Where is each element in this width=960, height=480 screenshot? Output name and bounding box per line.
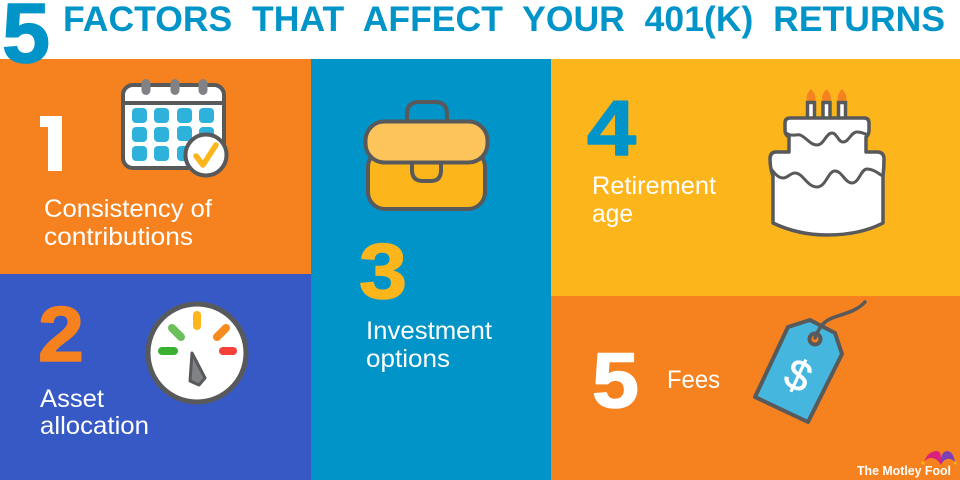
label: consistency of contributions: Consistency of: [44, 195, 212, 223]
panel: fees: [551, 296, 960, 480]
icon: gauge: [148, 304, 246, 402]
number 4: 4: [587, 84, 636, 172]
label: investment options: options: [366, 345, 450, 373]
panel: consistency of contributions: [0, 59, 311, 274]
icon: price tag: $: [777, 349, 819, 403]
icon: birthday cake: [770, 89, 884, 235]
number 2: 2: [38, 290, 84, 378]
logo: The Motley Fool: The Motley Fool: [857, 463, 951, 478]
number 5: 5: [592, 336, 639, 424]
title: FACTORS THAT AFFECT YOUR 401(K) RETURNS: [63, 0, 945, 39]
number 3: 3: [359, 227, 407, 315]
logo: The Motley Fool: [857, 451, 956, 478]
label: investment options: Investment: [366, 317, 492, 345]
panel: retirement age: [551, 59, 960, 296]
number 1: [40, 116, 62, 171]
icon: price tag: [755, 302, 865, 422]
label: asset allocation: Asset: [40, 385, 104, 413]
label: fees: Fees: [667, 366, 720, 394]
label: consistency of contributions: contributions: [44, 223, 193, 251]
label: asset allocation: allocation: [40, 412, 149, 440]
panel: investment options: [311, 59, 551, 480]
number 1: 1: [32, 100, 75, 188]
label: retirement age: Retirement: [592, 172, 716, 200]
icon: briefcase: [366, 102, 488, 209]
icon: calendar: [123, 79, 226, 176]
label: retirement age: age: [592, 200, 633, 228]
panel: asset allocation: [0, 274, 311, 480]
